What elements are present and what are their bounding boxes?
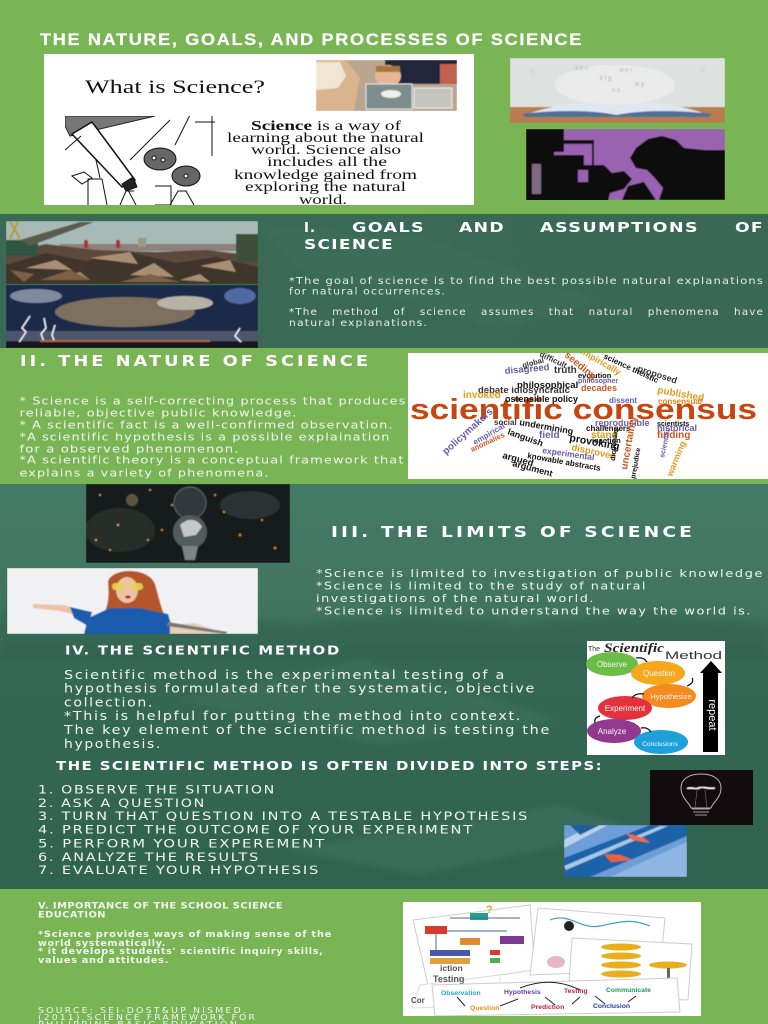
photo: running up blue stairs [564, 825, 687, 877]
word cloud: scientific consensus: scientists [657, 421, 689, 428]
photo: microscope silhouette [526, 129, 725, 200]
diagram: stacked scientific process charts: Communicate [606, 987, 651, 994]
word cloud: scientific consensus: truth [554, 365, 577, 376]
word cloud: scientific consensus: languish [506, 426, 545, 449]
diagram: scientific method cycle: Conclusions [642, 741, 678, 748]
word cloud: scientific consensus: ostensible policy [505, 394, 578, 404]
drawing: telescope and clouds [65, 115, 215, 205]
heading: goals and assumptions: ASSUMPTIONS [540, 221, 699, 236]
heading: goals and assumptions: AND [459, 221, 505, 236]
text: nature body: reliable, objective public knowledge. [20, 406, 298, 420]
photo: woman with glasses shrugging [7, 568, 258, 634]
diagram: stacked scientific process charts: Question [470, 1005, 499, 1012]
word cloud: scientific consensus: evolution [578, 371, 612, 380]
list: method steps: 3. TURN THAT QUESTION INTO A TESTABLE HYPOTHESIS [38, 809, 529, 823]
text: goals body: natural explanations. [289, 318, 428, 329]
text: goals body: *The method of science assumes that natural phenomena have [289, 307, 764, 318]
word cloud: scientific consensus: argued [501, 450, 535, 469]
word cloud: scientific consensus: scientific [659, 427, 672, 458]
panel: goals background [0, 214, 768, 348]
diagram: scientific method cycle: Analyze [598, 727, 627, 736]
word cloud: scientific consensus: uncertainty [619, 415, 639, 471]
text: goals body [289, 276, 764, 329]
text: nature body: * Science is a self-correcting process that produces [20, 394, 407, 408]
word cloud: scientific consensus: prejudice [630, 447, 642, 479]
text: source: (2011).SCIENCE FRAMEWORK FOR [38, 1013, 257, 1022]
word cloud: scientific consensus: undermining [519, 417, 574, 436]
text: importance body [38, 930, 332, 966]
text: importance body: world systematically. [38, 939, 166, 949]
list: method steps: 5. PERFORM YOUR EXPEREMENT [38, 836, 326, 850]
text: science definition: world. [299, 192, 347, 207]
diagram: scientific method cycle: Experiment [605, 704, 646, 713]
photo: light bulb with sparks [85, 484, 290, 563]
diagram: scientific method cycle: The [588, 646, 600, 653]
photo: open book: w y [634, 82, 644, 88]
word cloud: scientific consensus: empirically [577, 345, 623, 377]
word cloud: scientific consensus: science theistic [602, 352, 660, 385]
photo: open book: k f g [600, 76, 611, 82]
panel: what is science [44, 54, 474, 207]
text: limits body: *Science is limited to investigation of public knowledge [316, 567, 764, 580]
diagram: stacked scientific process charts: iction [440, 963, 463, 973]
photo: rubble after disaster [6, 221, 258, 284]
text: science definition: world. Science also [251, 142, 401, 157]
text: importance body: values and attitudes. [38, 956, 169, 966]
word cloud: scientific consensus: reproducible [595, 418, 650, 428]
photo: open book [510, 58, 725, 123]
word cloud: scientific consensus: experimental [542, 445, 595, 462]
text: goals body: *The goal of science is to find the best possible natural explanations [289, 276, 764, 287]
text: method body: collection. [64, 696, 154, 710]
word cloud: scientific consensus: disproven [570, 442, 617, 462]
heading: goals and assumptions: OF [735, 221, 764, 236]
photo: children with tanks [316, 60, 457, 111]
photo: open book: n s [612, 88, 620, 94]
text: limits body: investigations of the natural world. [316, 592, 595, 605]
diagram: stacked scientific process charts: Observation [441, 990, 481, 997]
photo: open book: o [700, 64, 705, 74]
word cloud: scientific consensus: invoked [463, 390, 501, 401]
heading: steps: THE SCIENTIFIC METHOD IS OFTEN DIVIDED INTO STEPS: [56, 758, 603, 773]
word cloud: scientific consensus: consensual [658, 397, 702, 406]
text: source: SOURCE: SEI-DOST&UP NISMED. [38, 1006, 248, 1015]
text: nature body: explains a variety of phenomena. [20, 466, 270, 480]
text: method body: Scientific method is the experimental testing of a [64, 668, 506, 682]
word cloud: scientific consensus: proposed [636, 363, 678, 386]
text: method body [63, 668, 551, 751]
photo: open book: d e r [620, 68, 632, 74]
word cloud: scientific consensus: debate idiosyncratic [478, 385, 570, 396]
word cloud: scientific consensus: inaction [592, 436, 621, 445]
diagram: scientific method cycle: repeat [706, 699, 718, 731]
heading: goals and assumptions: I. [304, 221, 316, 236]
word cloud: scientific consensus: seeding [562, 350, 598, 383]
word cloud: scientific consensus: historical [657, 423, 697, 433]
text: nature body: * A scientific fact is a well-confirmed observation. [20, 418, 394, 432]
word cloud: scientific consensus: philosopher [578, 378, 618, 385]
text: science definition: exploring the natural [245, 179, 406, 194]
word cloud: scientific consensus: social [494, 418, 517, 427]
text: method body: The key element of the scientific method is testing the [63, 723, 551, 737]
diagram: stacked scientific process charts [403, 902, 701, 1016]
word cloud: scientific consensus: dictionary [610, 427, 620, 461]
text: limits body: *Science is limited to the study of natural [316, 580, 647, 592]
heading: nature of science: II. THE NATURE OF SCIENCE [20, 352, 371, 370]
diagram: scientific method cycle [586, 640, 725, 755]
word cloud: scientific consensus: decades [581, 383, 617, 393]
diagram: scientific method cycle: Observe [597, 660, 628, 669]
text: science definition: knowledge gained from [234, 167, 418, 182]
word cloud: scientific consensus: challengers [586, 424, 631, 433]
diagram: stacked scientific process charts: ? [486, 904, 493, 916]
title: THE NATURE, GOALS, AND PROCESSES OF SCIENCE [40, 30, 583, 49]
text: nature body: for a observed phenomenon. [20, 442, 240, 456]
heading: limits of science: III. THE LIMITS OF SCIENCE [331, 523, 695, 541]
text: science definition: learning about the natural [227, 130, 424, 145]
diagram: scientific method cycle: Method [665, 650, 722, 662]
heading: importance of school science education [38, 902, 283, 920]
word cloud: scientific consensus: policymakers [441, 406, 496, 457]
text: importance body: * it develops students' scientific inquiry skills, [38, 947, 324, 957]
text: limits body: *Science is limited to understand the way the world is. [316, 604, 752, 618]
word cloud: scientific consensus: stand [591, 430, 618, 441]
text: science definition [227, 118, 424, 207]
heading: goals and assumptions: GOALS [352, 221, 425, 236]
word cloud: scientific consensus: difficult [538, 350, 568, 370]
diagram: stacked scientific process charts: Cor [411, 996, 425, 1005]
text: limits body [316, 567, 764, 618]
heading: goals and assumptions [304, 221, 764, 253]
text: source [38, 1006, 257, 1024]
word cloud: scientific consensus: published [656, 385, 705, 404]
photo: open book: a b c [575, 66, 588, 72]
photo: open book: h [530, 67, 535, 77]
text: method body: hypothesis. [64, 737, 162, 751]
list: method steps: 2. ASK A QUESTION [38, 796, 206, 810]
word cloud: scientific consensus: global [521, 356, 545, 370]
photo: lightning storm [6, 285, 258, 348]
diagram: stacked scientific process charts: Testing [433, 974, 464, 984]
word cloud: scientific consensus: disagreed [504, 362, 550, 377]
text: method body: *This is helpful for putting the method into context. [64, 709, 522, 723]
word cloud: scientific consensus: argument [511, 458, 554, 479]
text: nature body: *A scientific hypothesis is a possible explaination [20, 430, 390, 444]
text: science definition: includes all the [267, 154, 387, 169]
diagram: scientific method cycle: Scientific [604, 640, 664, 655]
word cloud: scientific consensus: knowable abstracts [527, 451, 602, 473]
text: method body: hypothesis formulated after the systematic, objective [64, 682, 536, 696]
heading: what is science: What is Science? [85, 77, 265, 98]
word cloud: scientific consensus: finding [657, 430, 690, 441]
text: goals body: for natural occurrences. [289, 286, 446, 298]
word cloud: scientific consensus: field [539, 430, 560, 441]
text: importance body: *Science provides ways of making sense of the [38, 930, 332, 940]
diagram: stacked scientific process charts: Testing [564, 988, 588, 995]
diagram: scientific method cycle: Hypothesize [650, 692, 692, 701]
heading: goals and assumptions: SCIENCE [304, 238, 394, 253]
text: nature body: *A scientific theory is a conceptual framework that [20, 454, 404, 466]
list: method steps: 1. OBSERVE THE SITUATION [38, 782, 276, 796]
heading: importance of school science education: V. IMPORTANCE OF THE SCHOOL SCIENCE [38, 902, 283, 912]
text: nature body [20, 394, 407, 480]
list: method steps [38, 782, 529, 877]
word cloud: scientific consensus: dissent [609, 396, 637, 405]
heading: scientific method: IV. THE SCIENTIFIC METHOD [65, 642, 341, 658]
word cloud: scientific consensus: scientific consensus [410, 394, 757, 426]
word cloud: scientific consensus: warming [664, 440, 688, 479]
word cloud: scientific consensus: anomalies [469, 430, 506, 454]
text: science definition: Science is a way of [251, 118, 402, 133]
word cloud: scientific consensus: provoking [568, 432, 621, 453]
panel: limits and method background [0, 484, 768, 889]
diagram: stacked scientific process charts: Hypothesis [504, 989, 541, 996]
list: method steps: 7. EVALUATE YOUR HYPOTHESIS [38, 863, 320, 877]
word cloud: scientific consensus: empirical [472, 421, 506, 447]
list: method steps: 6. ANALYZE THE RESULTS [38, 850, 260, 864]
diagram: scientific method cycle: Question [643, 669, 675, 678]
heading: importance of school science education: EDUCATION [38, 910, 106, 920]
photo: glowing idea bulb [650, 770, 753, 825]
list: method steps: 4. PREDICT THE OUTCOME OF YOUR EXPERIMENT [38, 822, 474, 836]
diagram: stacked scientific process charts: Prediction [531, 1004, 564, 1011]
diagram: stacked scientific process charts: Conclusion [593, 1003, 630, 1010]
word cloud: scientific consensus [408, 345, 768, 479]
word cloud: scientific consensus: philosophical [517, 380, 578, 391]
